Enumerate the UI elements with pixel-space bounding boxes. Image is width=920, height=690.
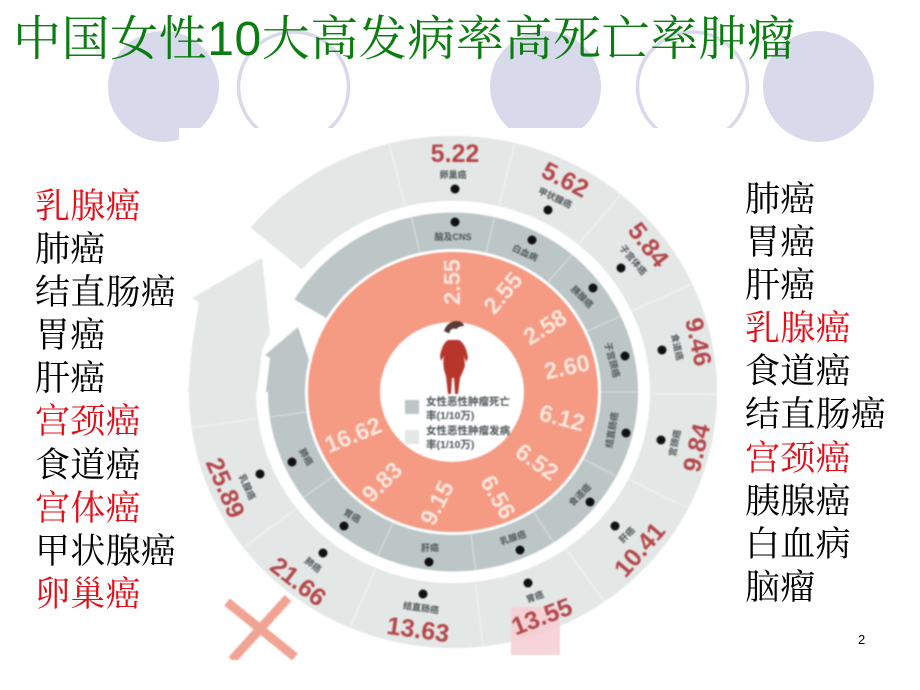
page number: 2 (858, 632, 865, 647)
inner ring: mortality values: 2.55 (439, 259, 465, 305)
inner ring: mortality values: 9.15 (415, 477, 459, 529)
incidence values, labels and dots: 5.22 (431, 140, 479, 168)
mortality ring labels and dots: 脑及CNS (434, 231, 472, 242)
left list: high incidence tumours: 卵巢癌 (35, 575, 141, 614)
inner ring: mortality values: 6.12 (537, 400, 587, 436)
incidence values, labels and dots: 宫颈癌 (666, 429, 683, 457)
incidence values, labels and dots: 甲状腺癌 (537, 185, 574, 210)
mortality ring labels and dots (288, 218, 630, 566)
legend: 率(1/10万) (426, 438, 474, 451)
outer ring: incidence (128, 77, 778, 690)
incidence values, labels and dots: 10.41 (609, 517, 671, 583)
legend: 率(1/10万) (426, 409, 474, 422)
legend: 女性恶性肿瘤发病 (426, 424, 510, 437)
inner ring: mortality values: 2.60 (542, 350, 592, 384)
inner ring: mortality values: 2.58 (519, 304, 571, 350)
incidence values, labels and dots: 13.63 (385, 612, 451, 648)
stamp mark (511, 607, 560, 655)
left list: high incidence tumours: 甲状腺癌 (35, 532, 176, 571)
incidence values, labels and dots (200, 140, 717, 648)
left list: high incidence tumours: 肝癌 (35, 359, 106, 398)
mortality ring labels and dots: 食道癌 (566, 481, 593, 508)
legend: 女性恶性肿瘤死亡 (426, 395, 510, 408)
incidence values, labels and dots: 9.84 (678, 421, 716, 475)
inner ring: mortality values: 16.62 (321, 412, 385, 458)
incidence values, labels and dots: 卵巢癌 (439, 169, 467, 180)
icon: red cross mark (227, 598, 295, 660)
inner ring: mortality values (305, 249, 601, 535)
incidence values, labels and dots: 25.89 (200, 454, 250, 522)
icon: woman figure (440, 321, 468, 394)
left list: high incidence tumours: 胃癌 (35, 316, 106, 355)
mortality ring labels and dots: 结直肠癌 (603, 411, 620, 449)
mortality ring labels and dots: 乳腺癌 (498, 528, 527, 547)
mortality ring labels and dots: 肺癌 (297, 446, 316, 467)
incidence values, labels and dots: 9.46 (679, 315, 717, 369)
right list: high mortality tumours: 胃癌 (745, 223, 816, 262)
incidence values, labels and dots: 21.66 (265, 552, 331, 612)
mortality ring labels and dots: 肝癌 (421, 542, 439, 553)
left list: high incidence tumours: 食道癌 (35, 446, 141, 485)
incidence values, labels and dots: 结直肠癌 (402, 600, 440, 615)
right list: high mortality tumours: 乳腺癌 (745, 309, 851, 348)
incidence values, labels and dots: 乳腺癌 (237, 472, 258, 501)
incidence values, labels and dots: 胃癌 (524, 588, 545, 605)
incidence values, labels and dots: 13.55 (508, 593, 576, 641)
left list: high incidence tumours (35, 187, 176, 614)
incidence values, labels and dots: 5.84 (622, 217, 674, 273)
incidence values, labels and dots: 肺癌 (303, 555, 324, 574)
right list: high mortality tumours (745, 180, 886, 607)
mortality ring labels and dots: 白血病 (511, 242, 540, 263)
mortality ring labels and dots: 胃癌 (342, 506, 363, 525)
arrow: outer ring head (188, 258, 270, 392)
inner ring: mortality values: 6.56 (475, 471, 521, 523)
title: 中国女性10大高发病率高死亡率肿瘤 (13, 13, 796, 66)
right list: high mortality tumours: 白血病 (745, 525, 851, 564)
inner ring: mortality values: 6.52 (511, 438, 563, 486)
left list: high incidence tumours: 肺癌 (35, 230, 106, 269)
right list: high mortality tumours: 结直肠癌 (745, 395, 886, 434)
middle ring: mortality labels (226, 172, 680, 612)
right list: high mortality tumours: 宫颈癌 (745, 439, 851, 478)
right list: high mortality tumours: 食道癌 (745, 352, 851, 391)
inner ring: mortality values: 9.83 (357, 457, 407, 507)
arrow: middle ring head (265, 327, 310, 392)
left list: high incidence tumours: 结直肠癌 (35, 273, 176, 312)
inner ring: mortality values: 2.55 (478, 267, 528, 319)
incidence values, labels and dots: 子宫体癌 (618, 242, 649, 277)
mortality ring labels and dots: 子宫颈癌 (603, 341, 622, 379)
right list: high mortality tumours: 肝癌 (745, 266, 816, 305)
right list: high mortality tumours: 肺癌 (745, 180, 816, 219)
incidence values, labels and dots: 食道癌 (669, 333, 686, 361)
incidence values, labels and dots: 5.62 (537, 156, 593, 204)
left list: high incidence tumours: 宫颈癌 (35, 402, 141, 441)
left list: high incidence tumours: 宫体癌 (35, 489, 141, 528)
mortality ring labels and dots: 胰腺癌 (569, 283, 596, 310)
right list: high mortality tumours: 脑瘤 (745, 568, 816, 607)
right list: high mortality tumours: 胰腺癌 (745, 482, 851, 521)
legend (405, 395, 510, 451)
left list: high incidence tumours: 乳腺癌 (35, 187, 141, 226)
incidence values, labels and dots: 肝癌 (616, 524, 637, 545)
